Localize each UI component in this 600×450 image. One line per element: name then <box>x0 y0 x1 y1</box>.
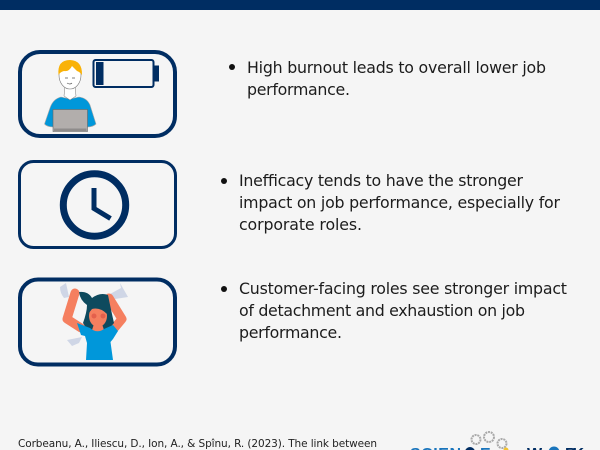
text: inefficacy bullet <box>221 171 560 234</box>
panel: burnout icon <box>20 52 175 136</box>
text: inefficacy bullet: corporate roles. <box>239 215 362 234</box>
text: inefficacy bullet: Inefficacy tends to have the stronger <box>239 171 524 190</box>
icon: person with laptop <box>44 60 96 132</box>
text: customer-facing bullet <box>221 279 567 342</box>
icon: stressed woman <box>60 283 128 360</box>
citation: Corbeanu, A., Iliescu, D., Ion, A., & Spînu, R. (2023). The link between <box>18 438 377 450</box>
text: customer-facing bullet: Customer-facing roles see stronger impact <box>239 279 567 298</box>
panel: stressed woman icon <box>20 280 175 364</box>
icon: clock <box>63 174 126 236</box>
panel: clock icon <box>20 162 176 248</box>
text: burnout bullet: High burnout leads to overall lower job <box>247 58 546 77</box>
logo: science for work <box>410 432 584 450</box>
text: inefficacy bullet: impact on job performance, especially for <box>239 193 560 212</box>
text: customer-facing bullet: performance. <box>239 323 342 342</box>
text: customer-facing bullet: of detachment and exhaustion on job <box>239 301 525 320</box>
text: burnout bullet: performance. <box>247 80 350 99</box>
text: burnout bullet <box>229 58 546 99</box>
icon: gears <box>472 432 506 448</box>
icon: low battery <box>94 60 159 87</box>
top banner <box>0 0 600 10</box>
